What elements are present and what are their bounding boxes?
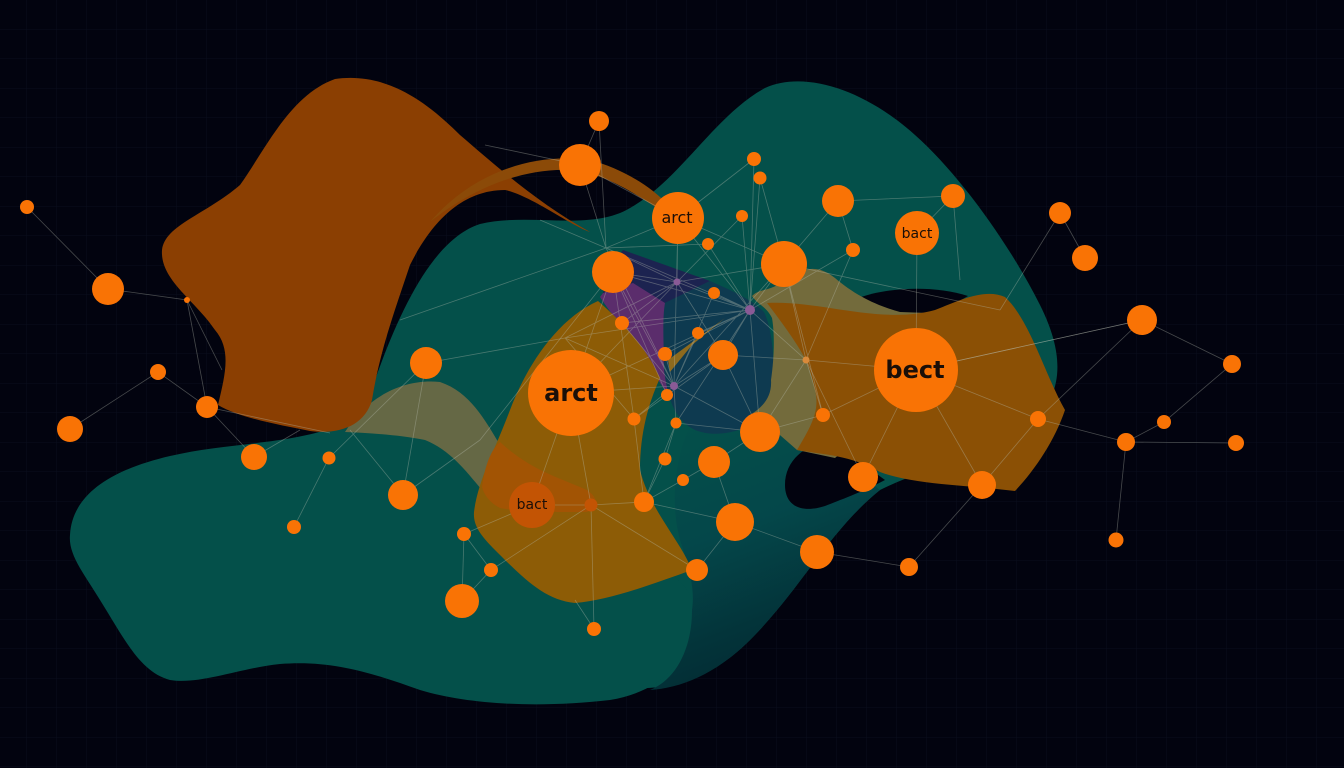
network nodes xyxy=(20,111,1244,636)
region: black gap upper right xyxy=(845,289,968,322)
node: arct medium xyxy=(652,192,704,244)
node: bact muted: bact xyxy=(517,497,548,513)
region: large teal upper right xyxy=(368,81,1057,688)
node: muted small xyxy=(584,498,598,512)
region: large teal lower left xyxy=(70,421,693,704)
node: bact medium xyxy=(895,211,939,255)
node: bact muted xyxy=(509,482,555,528)
node: bact medium: bact xyxy=(902,226,933,242)
region: olive band right xyxy=(752,269,1000,458)
node: arct large: arct xyxy=(544,379,598,407)
region: orange tail xyxy=(430,158,668,222)
node: bect large xyxy=(874,328,958,412)
region: purple wedge xyxy=(600,280,668,395)
region: burnt orange upper left xyxy=(162,78,590,432)
region: orange inside ochre xyxy=(482,442,596,512)
minor nodes xyxy=(20,111,1244,636)
region: dark teal overlap xyxy=(650,430,880,690)
node: bect large: bect xyxy=(885,356,945,384)
region: orange right xyxy=(767,294,1065,491)
region: black gap lower right xyxy=(785,440,885,509)
region: ochre centre xyxy=(474,301,692,603)
region: ochre sliver xyxy=(668,318,725,372)
node: arct medium: arct xyxy=(661,208,693,227)
network edges xyxy=(27,121,1236,629)
region: olive band left xyxy=(345,382,500,490)
hub markers xyxy=(670,278,810,390)
node: arct large xyxy=(528,350,614,436)
region: dark blue core xyxy=(663,281,774,434)
region: navy wedge xyxy=(603,250,710,303)
